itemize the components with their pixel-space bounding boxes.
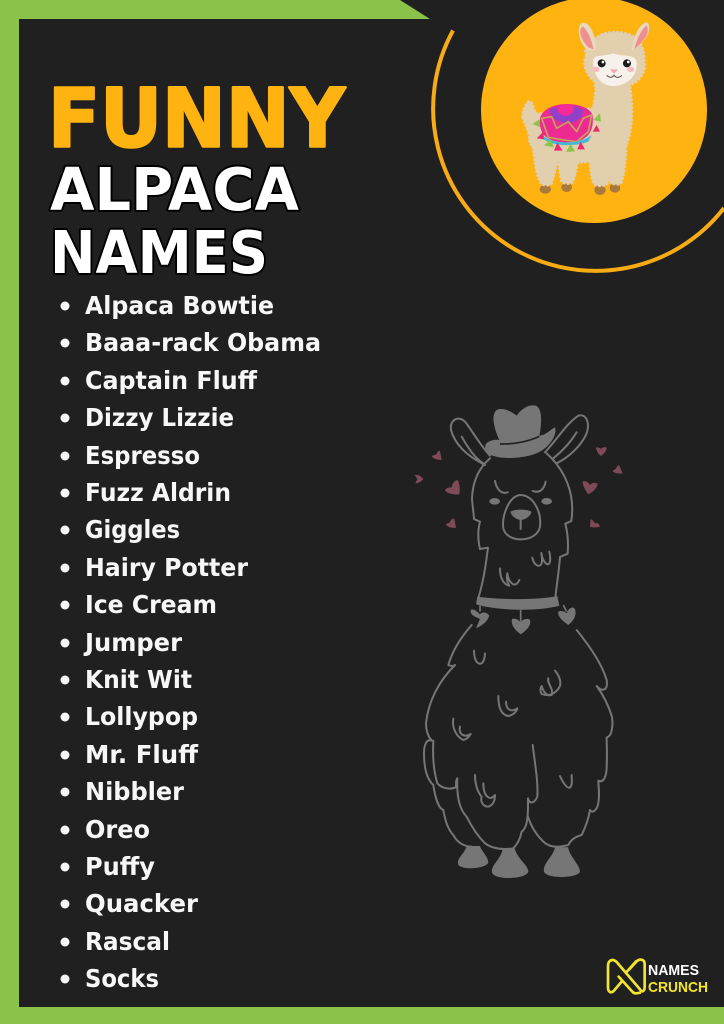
alpaca face xyxy=(592,53,637,86)
title: FUNNY: FUNNY xyxy=(48,72,346,166)
bullet list of names xyxy=(60,291,321,993)
bullet list of names: Baaa-rack Obama xyxy=(85,328,321,357)
llama head and neck xyxy=(451,415,588,598)
alpaca body and neck xyxy=(523,78,632,162)
alpaca head xyxy=(585,32,645,87)
alpaca blanket xyxy=(533,104,601,152)
bullet list of names: Rascal xyxy=(85,927,170,956)
bullet list of names: Ice Cream xyxy=(85,590,217,619)
bullet list of names: Espresso xyxy=(85,441,200,470)
bullet list of names: Mr. Fluff xyxy=(85,740,199,769)
llama body outline xyxy=(424,625,612,849)
title: NAMES: NAMES xyxy=(50,218,268,287)
bullet list of names: Knit Wit xyxy=(85,665,192,694)
bullet list of names: Puffy xyxy=(85,852,155,881)
bullet list of names: Fuzz Aldrin xyxy=(85,478,231,507)
bullet list of names: Dizzy Lizzie xyxy=(85,403,234,432)
llama hat xyxy=(485,405,556,458)
bullet list of names: Hairy Potter xyxy=(85,553,249,582)
orange circle xyxy=(481,0,707,223)
bullet list of names: Socks xyxy=(85,964,159,993)
logo word CRUNCH: CRUNCH xyxy=(648,979,708,996)
logo N mark xyxy=(608,960,645,993)
alpaca ears xyxy=(579,22,649,51)
llama face fill details xyxy=(489,498,552,520)
bullet list of names: Quacker xyxy=(85,889,199,918)
icon: cute alpaca with blanket xyxy=(523,22,649,195)
bullet list of names: Captain Fluff xyxy=(85,366,258,395)
illustration: gray llama outline with hat and hearts xyxy=(415,405,623,878)
llama pink hearts xyxy=(415,447,623,528)
bullet list of names: Lollypop xyxy=(85,702,198,731)
title: ALPACA: ALPACA xyxy=(50,155,299,224)
orange ring arc xyxy=(433,30,724,271)
bullet list of names: Nibbler xyxy=(85,777,185,806)
bullet list of names: Oreo xyxy=(85,815,150,844)
logo word NAMES: NAMES xyxy=(648,962,699,979)
bullet list of names: Jumper xyxy=(83,628,183,657)
llama collar and charms xyxy=(471,596,576,634)
alpaca legs and hooves xyxy=(533,143,626,195)
llama hooves xyxy=(458,846,580,878)
bullet list of names: Alpaca Bowtie xyxy=(85,291,274,320)
bullet list of names: Giggles xyxy=(85,515,180,544)
logo: Names Crunch xyxy=(608,960,708,996)
